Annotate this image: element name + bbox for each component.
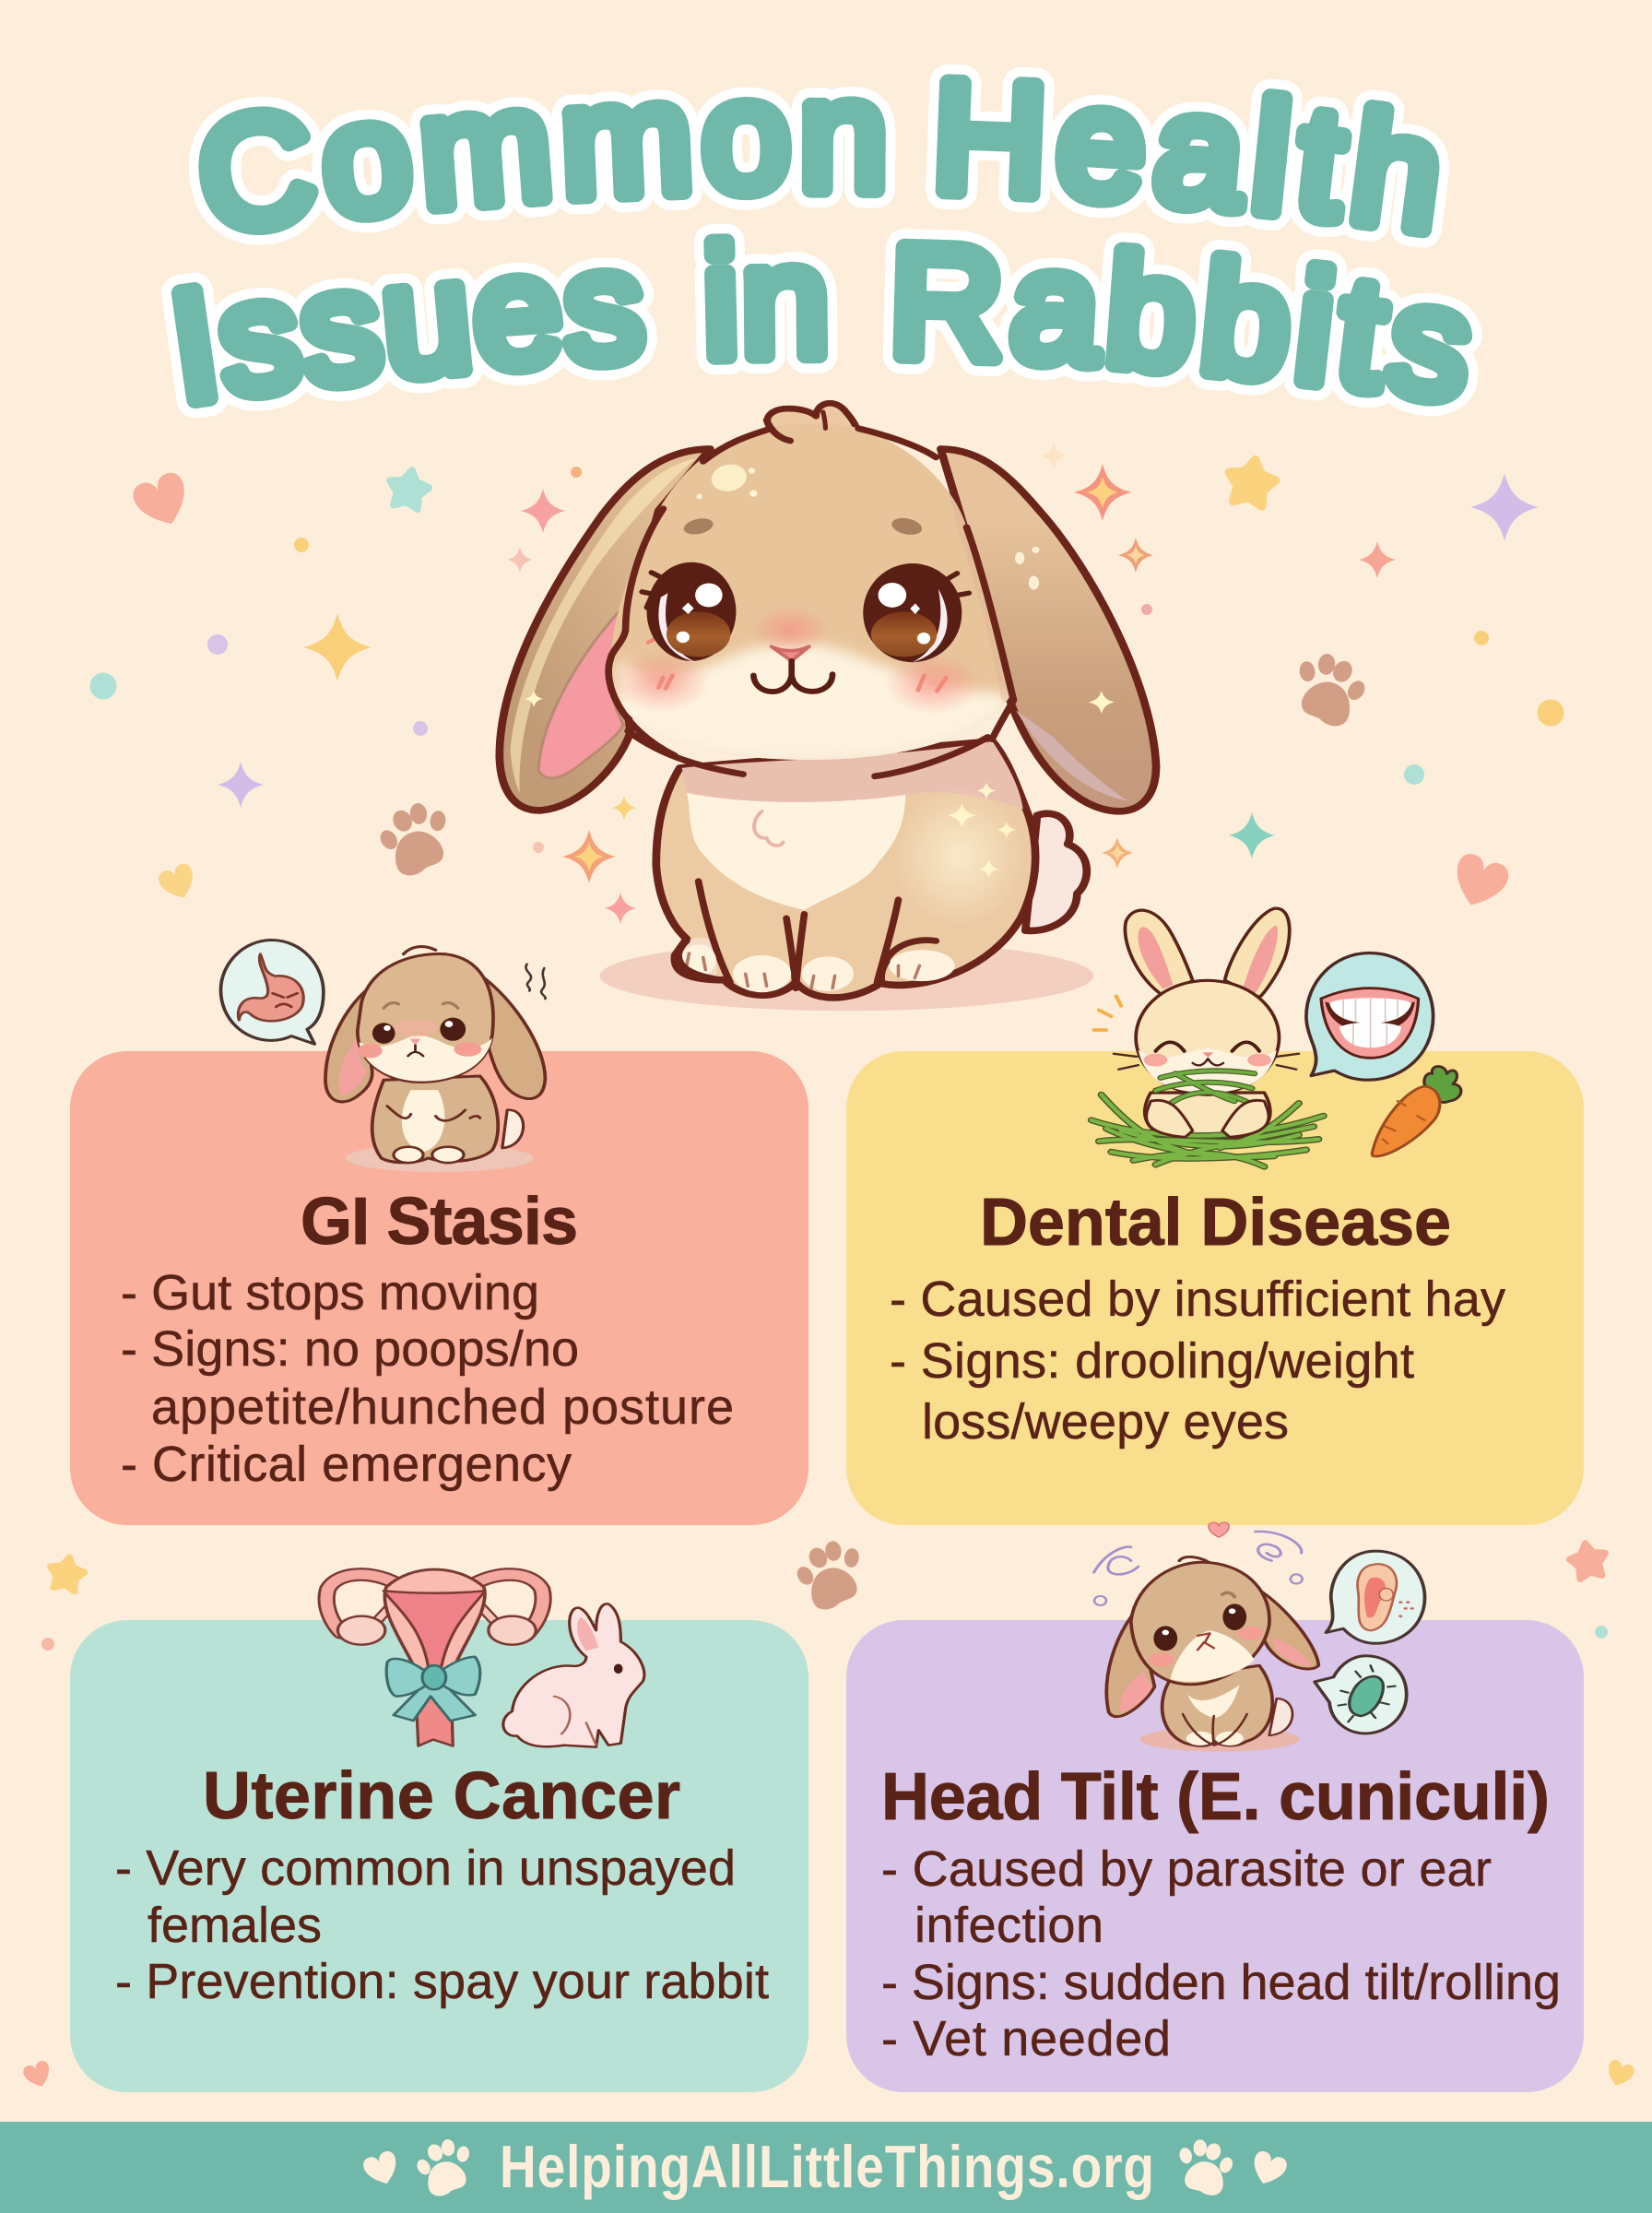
heading: Dental Disease: Dental Disease (980, 1186, 1451, 1260)
illustration: bunny chewing hay with teeth bubble and carrot (1092, 908, 1461, 1166)
footer bar (0, 2122, 1652, 2213)
text block: GI Stasis details: - Gut stops moving (121, 1265, 539, 1320)
title: Issues in Rabbits (171, 233, 1473, 409)
icon: carrot (1372, 1067, 1461, 1156)
icon: teeth speech bubble (1306, 953, 1434, 1080)
title: Issues in Rabbits (161, 223, 1482, 419)
illustration: uterus with teal bow and white rabbit (326, 1569, 644, 1747)
text block: Uterine Cancer details: - Prevention: spay your rabbit (115, 1954, 769, 2009)
text block: Dental Disease details: loss/weepy eyes (922, 1394, 1289, 1450)
text block: Head Tilt details: infection (914, 1898, 1103, 1953)
title (161, 65, 1482, 419)
background decorations: hearts, stars, sparkles, dots, paws (21, 443, 1636, 2091)
title: Common Health (198, 74, 1440, 238)
text block: GI Stasis details: - Signs: no poops/no (121, 1321, 579, 1377)
icon: teal bow (386, 1657, 480, 1721)
text block: GI Stasis details: appetite/hunched posture (151, 1379, 734, 1435)
icon: uterus (326, 1569, 543, 1746)
footer text: website: HelpingAllLittleThings.org (500, 2134, 1154, 2200)
heading: GI Stasis: GI Stasis (301, 1185, 578, 1259)
icon: footer paw left (413, 2137, 475, 2198)
panel: GI Stasis (70, 1051, 808, 1525)
text block: Dental Disease details: - Signs: drooling/weight (890, 1333, 1414, 1389)
icon: ear speech bubble (1326, 1551, 1425, 1643)
panel: Dental Disease (846, 1051, 1584, 1525)
text block: GI Stasis details: - Critical emergency (121, 1437, 572, 1492)
heading: Uterine Cancer: Uterine Cancer (203, 1759, 680, 1833)
heading: Head Tilt (E. cuniculi): Head Tilt (E. cuniculi) (881, 1760, 1550, 1834)
icon: footer paw right (1178, 2139, 1235, 2195)
icon: hay pile (1092, 1095, 1324, 1166)
text block: Uterine Cancer details: - Very common in unspayed (115, 1840, 736, 1896)
text block: Dental Disease details: - Caused by insufficient hay (890, 1272, 1505, 1327)
text block: Uterine Cancer details: females (148, 1898, 322, 1953)
title: Common Health (188, 65, 1449, 248)
text block: Uterine Cancer details (115, 1840, 769, 2009)
panel: Uterine Cancer (70, 1620, 808, 2092)
illustration: dizzy tilted bunny with ear and parasite bubbles (1094, 1522, 1425, 1752)
text block: Dental Disease details (890, 1272, 1505, 1450)
illustration: sad bunny with stomach bubble (220, 941, 546, 1172)
icon: footer heart right (1247, 2149, 1289, 2189)
panel: Head Tilt (846, 1620, 1584, 2092)
text block: Head Tilt details (881, 1841, 1561, 2066)
icon: hay in mouth (1156, 1071, 1255, 1106)
icon: white rabbit (503, 1604, 644, 1747)
text block: Head Tilt details: - Vet needed (881, 2011, 1171, 2066)
text block: GI Stasis details (121, 1265, 734, 1492)
icon: dizzy swirls and heart (1094, 1522, 1303, 1605)
text block: Head Tilt details: - Signs: sudden head tilt/rolling (881, 1955, 1561, 2010)
icon: stomach speech bubble (220, 941, 324, 1044)
main illustration: lop-eared bunny (500, 403, 1156, 1011)
icon: footer heart left (361, 2149, 403, 2189)
icon: parasite speech bubble (1315, 1656, 1407, 1734)
text block: Head Tilt details: - Caused by parasite or ear (881, 1841, 1492, 1897)
